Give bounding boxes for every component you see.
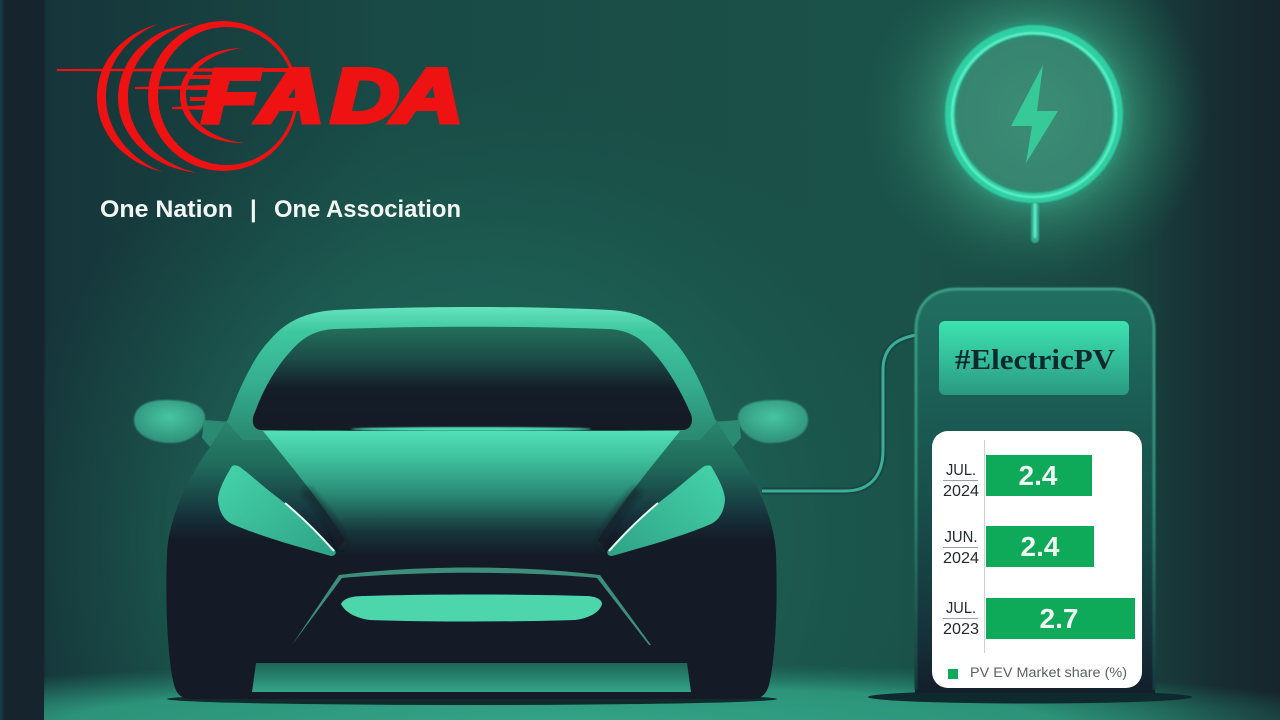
car body silhouette	[166, 420, 777, 699]
car roof and pillars	[227, 307, 716, 440]
left headlight	[218, 465, 336, 556]
label: June 2024: 2024	[943, 550, 979, 567]
station body	[915, 288, 1155, 693]
grille light bar	[341, 594, 602, 622]
logo wordmark: A	[256, 54, 324, 139]
label: July 2023: 2023	[943, 621, 979, 638]
logo rings	[57, 21, 298, 173]
charging cable	[762, 335, 916, 491]
chart legend: PV EV Market share (%)	[970, 665, 1127, 680]
label: June 2024	[943, 529, 979, 567]
label: July 2023: JUL.	[946, 600, 976, 617]
electric car	[134, 307, 808, 705]
label: July 2024: JUL.	[946, 462, 976, 479]
icon: ring stem	[1031, 202, 1039, 243]
label: July 2024: 2024	[943, 483, 979, 500]
car mirrors	[134, 400, 808, 447]
station screen	[939, 321, 1129, 395]
label: June 2024: JUN.	[944, 529, 978, 546]
windshield	[253, 327, 692, 431]
logo wordmark: D	[331, 54, 399, 139]
icon: glowing ring	[947, 27, 1121, 201]
hood side shadows	[305, 490, 638, 548]
tagline	[100, 196, 461, 223]
bar: July 2024: 2.4	[1019, 460, 1058, 491]
FADA logo	[57, 21, 463, 173]
charging station	[868, 288, 1192, 704]
right headlight	[607, 465, 725, 556]
lower air intake	[252, 663, 691, 692]
bar: July 2023	[986, 598, 1135, 639]
white chart card	[932, 431, 1142, 688]
label: July 2024	[943, 462, 979, 500]
charging symbol	[947, 27, 1121, 243]
grille outline	[292, 568, 651, 645]
logo wordmark: F	[202, 54, 261, 139]
car shadow	[167, 693, 777, 705]
screen text: #ElectricPV	[955, 345, 1115, 376]
bar: July 2024	[986, 455, 1092, 496]
tagline: |	[250, 196, 257, 223]
label: July 2023	[943, 600, 979, 638]
station base shadow	[868, 690, 1192, 704]
icon: lightning bolt	[1011, 65, 1058, 163]
hood	[263, 431, 680, 556]
bar: June 2024: 2.4	[1021, 531, 1060, 562]
bar: July 2023: 2.7	[1040, 603, 1078, 634]
tagline: One Association	[274, 196, 461, 223]
bar: June 2024	[986, 526, 1094, 567]
windshield base glow	[351, 427, 591, 431]
logo wordmark: A	[390, 54, 463, 139]
logo wordmark	[202, 54, 463, 139]
tagline: One Nation	[100, 196, 233, 223]
chart axis	[984, 440, 986, 653]
